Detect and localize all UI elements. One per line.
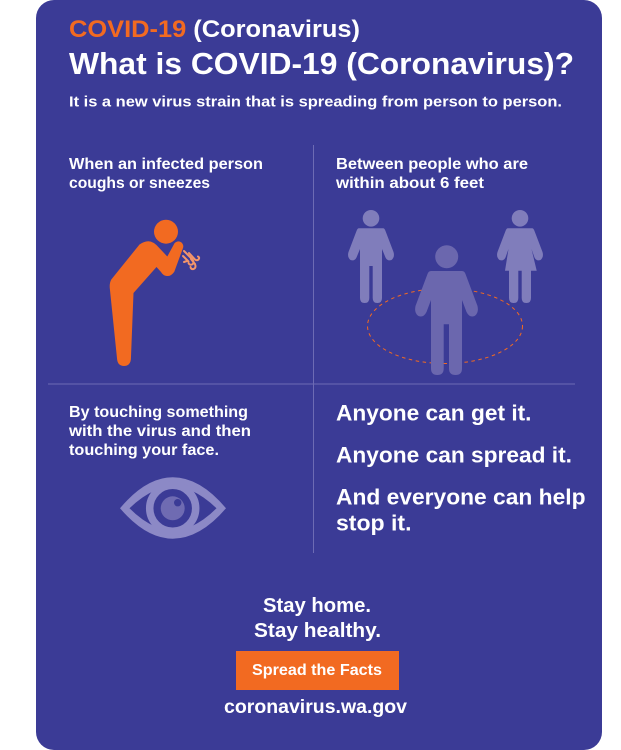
icon: person center bbox=[415, 245, 478, 375]
text block: anyone can: stop it. bbox=[336, 510, 412, 536]
icon: person right bbox=[497, 210, 543, 303]
text block: anyone can: Anyone can spread it. bbox=[336, 442, 572, 468]
text block: stay home: Stay healthy. bbox=[254, 620, 381, 642]
title: eyebrow: COVID-19 (Coronavirus) bbox=[69, 16, 360, 43]
subtitle: It is a new virus strain that is spreading from person to person. bbox=[69, 94, 562, 110]
website url: coronavirus.wa.gov bbox=[224, 696, 407, 718]
text block: coughs or sneezes: When an infected person bbox=[69, 156, 263, 173]
text block: touching your face: By touching something bbox=[69, 404, 248, 421]
text block: coughs or sneezes: coughs or sneezes bbox=[69, 175, 210, 192]
text block: stay home bbox=[254, 595, 381, 642]
text block: touching your face: with the virus and then bbox=[68, 423, 251, 440]
text block: anyone can bbox=[336, 400, 586, 536]
icon: person coughing bbox=[110, 220, 199, 366]
icon: distance ring bbox=[368, 288, 522, 364]
icon: eye bbox=[120, 477, 226, 539]
text block: stay home: Stay home. bbox=[263, 595, 371, 617]
text block: within about 6 feet bbox=[335, 156, 528, 192]
icon: sneeze droplets bbox=[183, 251, 199, 269]
text block: anyone can: Anyone can get it. bbox=[336, 400, 532, 425]
text block: touching your face bbox=[68, 404, 251, 459]
icon: person left bbox=[348, 210, 394, 303]
text block: within about 6 feet: Between people who are bbox=[336, 156, 528, 173]
title: main heading: What is COVID-19 (Coronavirus)? bbox=[69, 46, 574, 81]
text block: within about 6 feet: within about 6 feet bbox=[335, 175, 485, 192]
button: spread the facts: Spread the Facts bbox=[252, 662, 382, 679]
button: spread the facts bbox=[236, 651, 399, 690]
text block: touching your face: touching your face. bbox=[69, 442, 219, 459]
text block: coughs or sneezes bbox=[69, 156, 263, 192]
text block: anyone can: And everyone can help bbox=[336, 484, 586, 509]
